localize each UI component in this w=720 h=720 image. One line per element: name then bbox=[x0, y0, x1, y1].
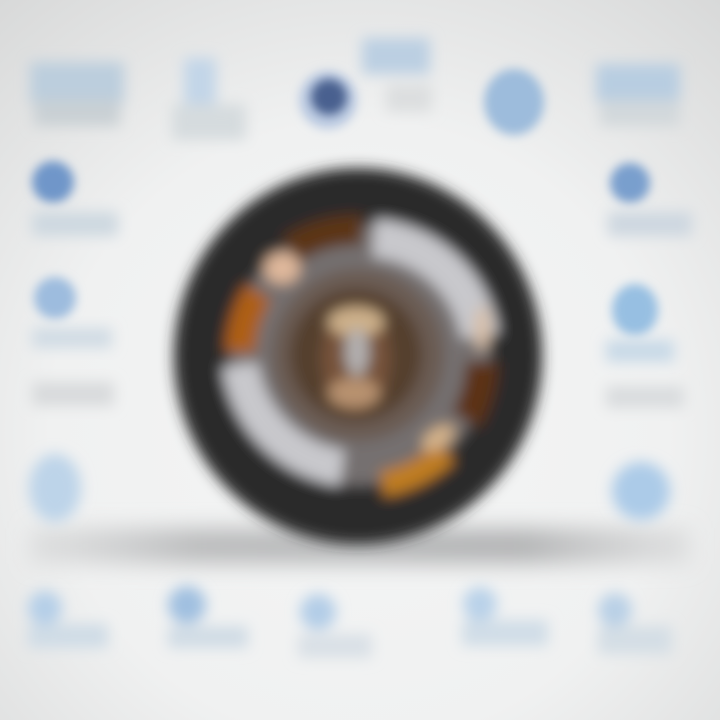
white arc top right bbox=[374, 238, 480, 336]
peach highlight bbox=[264, 252, 300, 284]
icon: left blue circle two bbox=[34, 277, 76, 319]
icon: right blue circle two bbox=[612, 284, 658, 336]
hub inner bbox=[290, 289, 422, 421]
right text three bbox=[606, 386, 684, 408]
bottom item four bbox=[462, 587, 548, 646]
top centre text block bbox=[362, 38, 432, 112]
right text two bbox=[606, 340, 674, 362]
panel: right column bbox=[606, 163, 692, 520]
orange left arc bbox=[240, 292, 258, 352]
top second icon and text bbox=[172, 58, 246, 140]
tan highlight bbox=[418, 419, 458, 457]
bottom item five bbox=[598, 593, 672, 654]
hub bottom tan bbox=[328, 378, 380, 408]
tan tip bbox=[474, 306, 490, 350]
icon: left pale blue shape bbox=[29, 454, 81, 522]
icon: light blue circle bbox=[484, 69, 544, 135]
orange bottom right arc bbox=[382, 452, 446, 484]
rim base bbox=[230, 225, 490, 485]
left text three bbox=[32, 382, 114, 406]
bottom item one bbox=[28, 591, 108, 648]
panel: bottom row bbox=[28, 586, 672, 658]
left text two bbox=[32, 328, 112, 348]
icon: dark blue circle bbox=[299, 71, 357, 129]
panel: top row bbox=[30, 38, 680, 140]
hub brown core bbox=[322, 306, 390, 410]
left text one bbox=[32, 212, 118, 236]
brown top arc bbox=[290, 230, 362, 250]
panel: left column bbox=[29, 161, 118, 522]
ground shadow bbox=[30, 528, 690, 564]
hub top tan bbox=[328, 307, 384, 337]
icon: right pale blue circle bbox=[612, 462, 670, 520]
bottom item two bbox=[168, 586, 248, 648]
right text one bbox=[608, 212, 692, 236]
hub ring bbox=[272, 269, 444, 441]
wheel bbox=[174, 168, 542, 544]
white arc bottom left bbox=[240, 365, 342, 468]
bottom item three bbox=[298, 594, 372, 658]
hub centre gray bbox=[345, 328, 369, 376]
top right text block bbox=[596, 64, 680, 126]
icon: left blue circle one bbox=[32, 161, 74, 203]
dark brown right arc bbox=[466, 362, 482, 420]
top left text block bbox=[30, 62, 124, 126]
icon: right blue circle one bbox=[610, 163, 650, 203]
tyre bbox=[174, 168, 542, 544]
